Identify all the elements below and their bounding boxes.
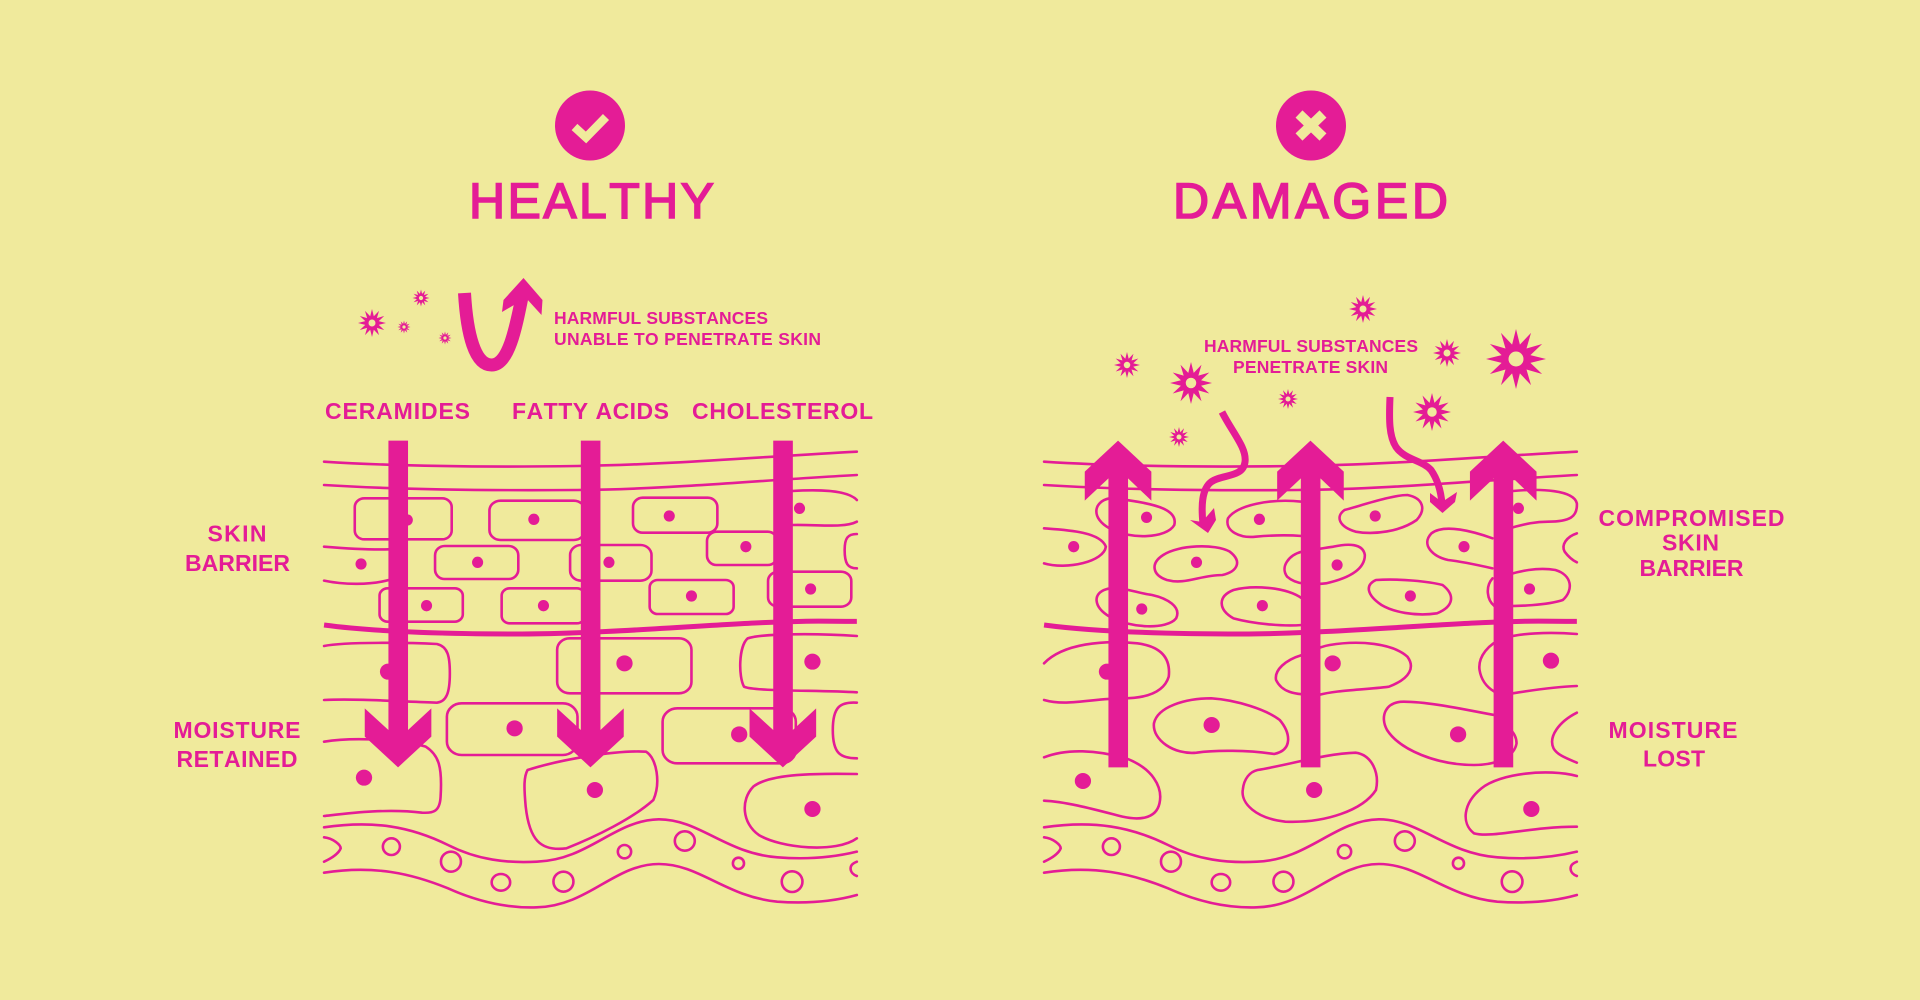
icon: check mark badge [555,90,625,160]
text: harmful substances penetrate: PENETRATE SKIN [1233,357,1388,377]
arrow: substance entering skin, right [1390,397,1457,513]
label: skin barrier: BARRIER [185,550,290,576]
label: moisture lost [1608,717,1738,772]
label: compromised skin barrier: COMPROMISED [1598,505,1784,531]
label: compromised skin barrier: BARRIER [1640,555,1744,581]
text: harmful substances unable to penetrate: HARMFUL SUBSTANCES [554,308,768,328]
ingredient labels: CERAMIDES [325,398,470,424]
blood vessel [1044,819,1577,907]
ingredient labels: FATTY ACIDS [512,398,669,424]
text: harmful substances unable to penetrate: UNABLE TO PENETRATE SKIN [554,329,821,349]
arrows: ingredients penetrate downward [365,441,816,767]
text: harmful substances penetrate [1204,336,1418,377]
ingredient labels: CHOLESTEROL [692,398,873,424]
brick-shaped barrier cells [324,490,857,623]
arrows: moisture escapes upward [1085,441,1537,767]
label: compromised skin barrier: SKIN [1662,530,1719,556]
ingredient labels [325,398,873,424]
label: moisture lost: MOISTURE [1608,717,1738,743]
label: moisture retained: RETAINED [176,746,298,772]
cell nuclei [1068,503,1559,817]
label: moisture retained [174,717,300,772]
label: moisture lost: LOST [1643,746,1705,772]
blood vessel [324,819,857,907]
heading: damaged: DAMAGED [1173,173,1448,229]
cell nuclei [356,503,821,817]
harmful substances bursts [1114,295,1546,447]
panel: damaged skin [1044,90,1784,907]
harmful substances bursts [358,290,452,344]
arrow: substances deflected upward [464,278,542,365]
diagram: healthy skin layers [324,441,857,907]
text: harmful substances penetrate: HARMFUL SUBSTANCES [1204,336,1418,356]
label: compromised skin barrier [1598,505,1784,581]
text: harmful substances unable to penetrate [554,308,821,349]
lower layer cells [324,634,857,849]
icon: cross badge [1276,90,1346,160]
diagram: damaged skin layers [1044,441,1577,907]
skin surface lines [1044,452,1577,634]
irregular barrier cells [1044,490,1577,626]
arrow: substance entering skin, left [1190,412,1245,533]
label: skin barrier [185,520,290,576]
heading: healthy: HEALTHY [469,173,714,229]
panel: healthy skin [174,90,873,907]
label: skin barrier: SKIN [208,520,266,546]
skin surface lines [324,452,857,634]
lower layer cells [1044,633,1577,835]
label: moisture retained: MOISTURE [174,717,300,743]
